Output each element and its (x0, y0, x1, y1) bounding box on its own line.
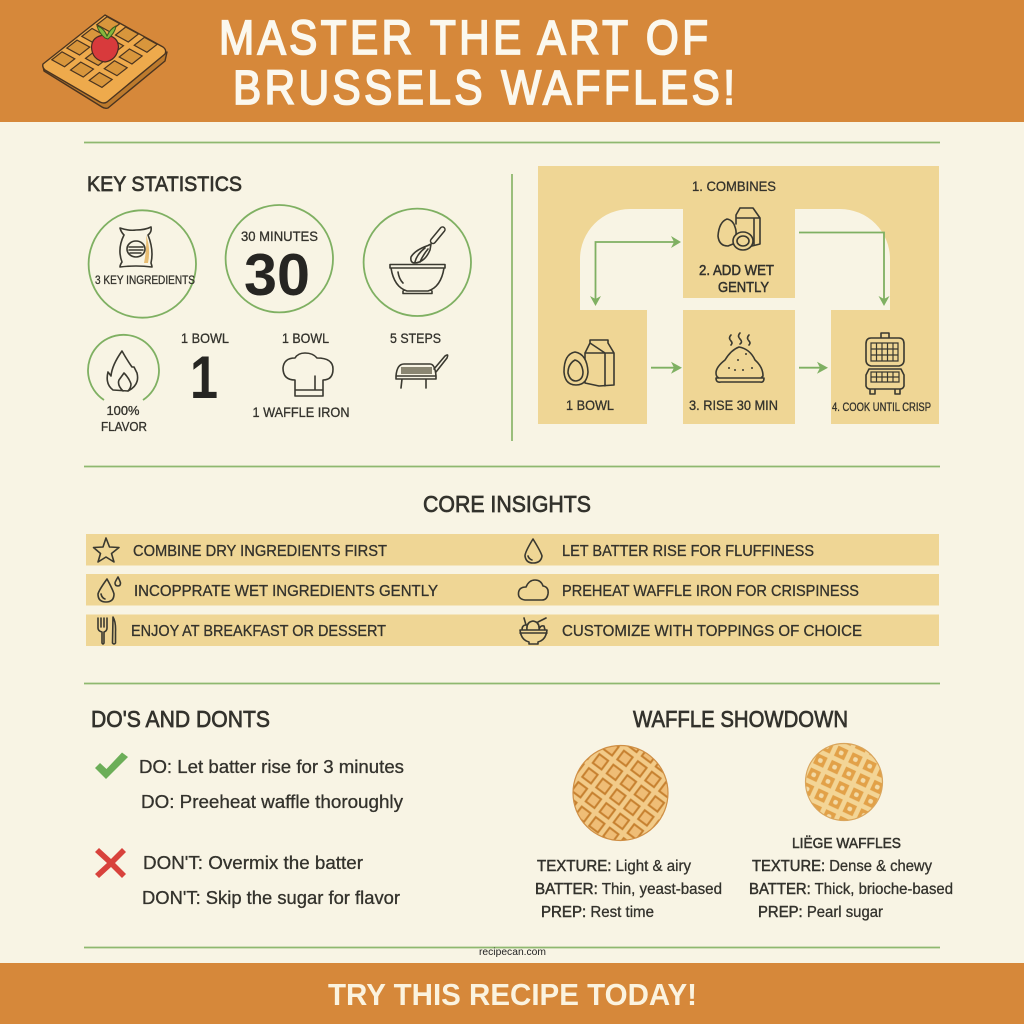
icon: waffle with strawberry (43, 15, 167, 108)
heading: key statistics: KEY STATISTICS (87, 173, 242, 196)
brussels waffle (573, 746, 668, 840)
heading: do's and donts: DO'S AND DONTS (91, 706, 270, 732)
stat: 5 steps: 5 STEPS (390, 330, 441, 346)
heading: waffle showdown: WAFFLE SHOWDOWN (633, 706, 848, 732)
liege specs (749, 858, 953, 921)
heading: core insights: CORE INSIGHTS (423, 491, 591, 517)
liege specs: PREP: Pearl sugar (758, 904, 884, 921)
panel: process flow (538, 166, 939, 424)
step 1 label: 1. COMBINES (692, 178, 776, 194)
insight: enjoy: ENJOY AT BREAKFAST OR DESSERT (131, 623, 386, 640)
step box: rise (683, 310, 795, 424)
stat: 30 minutes: 30 (244, 242, 310, 308)
flow background (538, 166, 939, 424)
stat: 3 key ingredients: 3 KEY INGREDIENTS (95, 273, 195, 287)
insight: customize: CUSTOMIZE WITH TOPPINGS OF CHOICE (562, 623, 862, 640)
stat: 1 bowl, 1 waffle iron (252, 330, 350, 420)
stat: 30 minutes: 30 MINUTES (241, 228, 318, 244)
arrow: add wet to cook (799, 232, 890, 306)
step 2: add wet: 2. ADD WET (699, 263, 774, 279)
stat: 30 minutes (226, 205, 333, 312)
liege waffles label: LIËGE WAFFLES (792, 835, 901, 852)
arrow: bowl to add wet (590, 236, 681, 306)
do item 2: DO: Preeheat waffle thoroughly (141, 792, 403, 812)
stat: 1 bowl, 1 waffle iron: 1 BOWL (282, 330, 329, 346)
step 3: rise: 3. RISE 30 MIN (689, 397, 778, 413)
liege specs: TEXTURE: Dense & chewy (752, 858, 932, 875)
brussels specs: BATTER: Thin, yeast-based (535, 881, 722, 898)
liege specs: BATTER: Thick, brioche-based (749, 881, 953, 898)
footer banner (0, 963, 1024, 1024)
insight: enjoy (98, 617, 386, 644)
insight: combine dry (94, 538, 387, 562)
stat: 1 bowl (181, 330, 229, 411)
stat: 100% flavor: FLAVOR (101, 420, 147, 434)
stat: whisk and bowl (364, 209, 471, 316)
step 2: add wet: GENTLY (718, 280, 769, 296)
insight: let batter rise (525, 539, 814, 563)
title (219, 10, 735, 115)
brussels specs: TEXTURE: Light & airy (537, 858, 691, 875)
stat: 1 bowl, 1 waffle iron: 1 WAFFLE IRON (252, 404, 350, 420)
insight: let batter rise: LET BATTER RISE FOR FLUFFINESS (562, 543, 814, 560)
stat: 100% flavor: 100% (106, 404, 140, 418)
insight: combine dry: COMBINE DRY INGREDIENTS FIRST (133, 543, 387, 560)
title: MASTER THE ART OF (219, 10, 708, 65)
stat: 100% flavor (88, 335, 159, 434)
panel: do's and don'ts (91, 706, 404, 908)
insight: incorporate wet: INCOPPRATE WET INGREDIENTS GENTLY (134, 583, 438, 600)
step 4: cook (832, 333, 931, 414)
brussels specs (535, 858, 722, 921)
stat: 1 bowl: 1 (190, 344, 218, 411)
watermark: recipecan.com (479, 947, 546, 958)
insight: preheat (518, 580, 859, 600)
footer call to action: TRY THIS RECIPE TODAY! (328, 977, 697, 1012)
stat: 3 key ingredients (89, 210, 196, 318)
icon: check mark (95, 752, 128, 779)
brussels specs: PREP: Rest time (541, 904, 654, 921)
header banner (0, 0, 1024, 122)
insight: preheat: PREHEAT WAFFLE IRON FOR CRISPINESS (562, 583, 859, 600)
don't item 2: DON'T: Skip the sugar for flavor (142, 888, 400, 908)
stat: 1 bowl: 1 BOWL (181, 330, 229, 346)
arrow: bowl to rise (651, 362, 682, 374)
don't item 1: DON'T: Overmix the batter (143, 853, 363, 873)
title: BRUSSELS WAFFLES! (233, 60, 735, 115)
icon: cross mark (95, 848, 126, 878)
step 2: add wet (699, 208, 774, 296)
step: 1 bowl: 1 BOWL (566, 397, 614, 413)
insight: customize (520, 618, 862, 644)
insight: incorporate wet (98, 577, 438, 602)
step 4: cook: 4. COOK UNTIL CRISP (832, 402, 931, 414)
panel: waffle showdown (535, 706, 953, 921)
do item 1: DO: Let batter rise for 3 minutes (139, 757, 404, 777)
strawberry (92, 35, 118, 62)
arrow: rise to cook (799, 362, 828, 374)
step 3: rise (689, 333, 778, 413)
panel: core insights (86, 491, 939, 646)
liege waffle (806, 744, 882, 820)
panel: key statistics (87, 173, 471, 434)
stat: 5 steps (390, 330, 448, 388)
step: 1 bowl (564, 340, 614, 413)
